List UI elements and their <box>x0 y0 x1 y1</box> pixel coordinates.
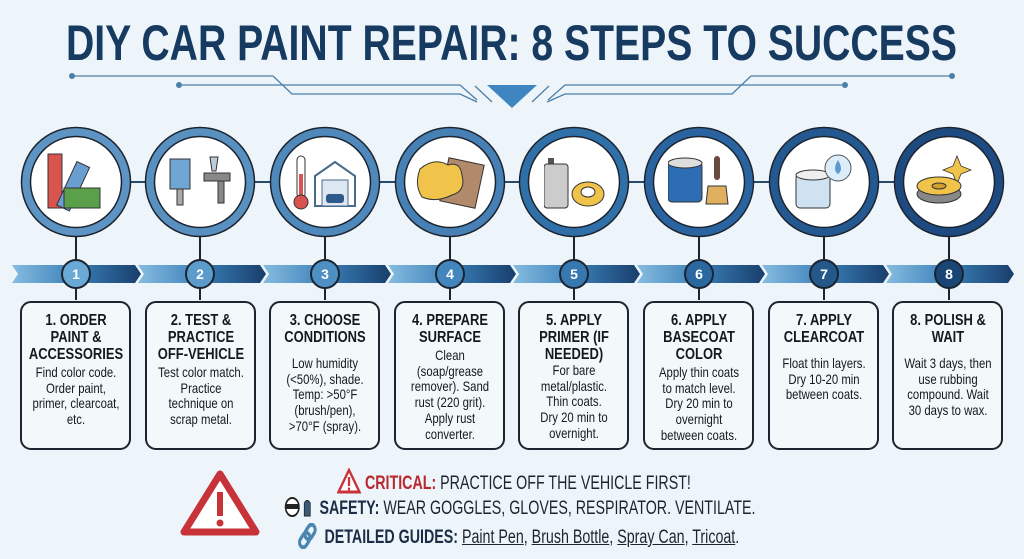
panel: step 8 <box>892 301 1003 450</box>
panel: step 2: 2. TEST & <box>170 312 231 329</box>
panel: step 2: Practice <box>180 380 221 396</box>
callout: detailed guides: DETAILED GUIDES: Paint Pen, Brush Bottle, Spray Can, Tricoat. <box>324 527 739 548</box>
panel: step 8: 30 days to wax. <box>908 402 987 418</box>
timeline: icon circles, connectors, chevron band, numbers: 8 <box>945 266 953 282</box>
icon: clearcoat can and drop <box>796 154 852 208</box>
icon: thermometer and garage <box>294 156 356 210</box>
callout: critical: CRITICAL: PRACTICE OFF THE VEHICLE FIRST! <box>365 473 691 494</box>
panel: step 7: CLEARCOAT <box>783 329 864 346</box>
panel: step 1: ACCESSORIES <box>28 346 123 363</box>
panel: step 8: 8. POLISH & <box>910 312 985 329</box>
panel: step 6: Dry 20 min to <box>665 395 732 411</box>
timeline: icon circles, connectors, chevron band, numbers: 4 <box>446 266 454 282</box>
panel: step 2: Test color match. <box>158 364 243 380</box>
panel: step 7: Dry 10-20 min <box>788 371 859 387</box>
panel: step 3: Temp: >50°F <box>292 386 357 402</box>
panel: step 4: 4. PREPARE <box>411 312 488 329</box>
panel: step 1: Order paint, <box>46 380 105 396</box>
panel: step 3 <box>269 301 380 450</box>
panel: step 5: 5. APPLY <box>546 312 601 329</box>
panel: step 2: technique on <box>168 395 233 411</box>
panel: step 6: overnight <box>675 411 722 427</box>
panel: step 6 <box>643 301 754 450</box>
panel: step 4: Clean <box>435 347 464 363</box>
panel: step 1: Find color code. <box>35 364 116 380</box>
panel: step 4: (soap/grease <box>416 363 483 379</box>
panel: step 5: metal/plastic. <box>540 378 607 394</box>
panel: step 2: PRACTICE <box>167 329 234 346</box>
timeline: icon circles, connectors, chevron band, numbers: 3 <box>321 266 329 282</box>
icon: color swatches <box>48 154 100 212</box>
panel: step 5 <box>518 301 629 450</box>
timeline: icon circles, connectors, chevron band, numbers: 5 <box>570 266 578 282</box>
decorative header lines and triangle pointer <box>69 73 955 108</box>
panel: step 5: Thin coats. <box>546 393 601 409</box>
icon: polishing pad with sparkles <box>916 155 972 204</box>
callout: safety: SAFETY: WEAR GOGGLES, GLOVES, RESPIRATOR. VENTILATE. <box>319 498 756 519</box>
panel: step 3: (brush/pen), <box>294 402 355 418</box>
icon: panel and spray gun <box>170 156 230 206</box>
panel: step 6: COLOR <box>675 346 722 363</box>
panel: step 4: Apply rust <box>424 410 475 426</box>
panel: step 6: BASECOAT <box>663 329 734 346</box>
panel: step 5: For bare <box>552 362 595 378</box>
panel: step 1: PAINT & <box>50 329 101 346</box>
icon: spray can and tape <box>544 158 604 208</box>
panel: step 8: Wait 3 days, then <box>904 355 991 371</box>
panel: step 2 <box>145 301 256 450</box>
panel: step 5: Dry 20 min to <box>540 409 607 425</box>
timeline: icon circles, connectors, chevron band, numbers: 1 <box>72 266 80 282</box>
panel: step 4 <box>394 301 505 450</box>
panel: step 4: rust (220 grit). <box>414 394 485 410</box>
panel: step 4: SURFACE <box>419 329 480 346</box>
panel: step 3: (<50%), shade. <box>286 371 363 387</box>
panel: step 6: to match level. <box>662 380 735 396</box>
panel: step 7: between coats. <box>785 386 862 402</box>
panel: step 5: PRIMER (IF <box>539 329 608 346</box>
panel: step 8: use rubbing <box>918 371 977 387</box>
panel: step 7 <box>768 301 879 450</box>
icon: sponge and sandpaper <box>416 157 485 209</box>
panel: step 4: converter. <box>425 426 474 442</box>
panel: step 1: primer, clearcoat, <box>32 395 119 411</box>
timeline: icon circles, connectors, chevron band, numbers: 2 <box>196 266 204 282</box>
panel: step 6: between coats. <box>660 427 737 443</box>
panel: step 3: Low humidity <box>291 355 358 371</box>
panel: step 6: 6. APPLY <box>671 312 726 329</box>
panel: step 1 <box>20 301 131 450</box>
panel: step 3: CONDITIONS <box>284 329 365 346</box>
icon: paint can and brush <box>668 156 729 204</box>
panel: step 1: etc. <box>66 411 85 427</box>
panel: step 8: compound. Wait <box>907 386 988 402</box>
panel: step 5: overnight. <box>549 425 598 441</box>
panel: step 4: remover). Sand <box>410 378 489 394</box>
panel: step 7: 7. APPLY <box>796 312 851 329</box>
timeline: icon circles, connectors, chevron band, numbers <box>12 126 1014 300</box>
panel: step 7: Float thin layers. <box>782 355 865 371</box>
panel: step 2: OFF-VEHICLE <box>157 346 244 363</box>
panel: step 8: WAIT <box>931 329 964 346</box>
timeline: icon circles, connectors, chevron band, numbers: 6 <box>695 266 703 282</box>
panel: step 3: 3. CHOOSE <box>289 312 360 329</box>
panel: step 1: 1. ORDER <box>45 312 106 329</box>
panel: step 6: Apply thin coats <box>658 364 739 380</box>
panel: step 5: NEEDED) <box>544 346 603 363</box>
panel: step 3: >70°F (spray). <box>288 418 361 434</box>
panel: step 2: scrap metal. <box>170 411 231 427</box>
icon: large warning triangle <box>180 470 260 536</box>
timeline: icon circles, connectors, chevron band, numbers: 7 <box>820 266 828 282</box>
